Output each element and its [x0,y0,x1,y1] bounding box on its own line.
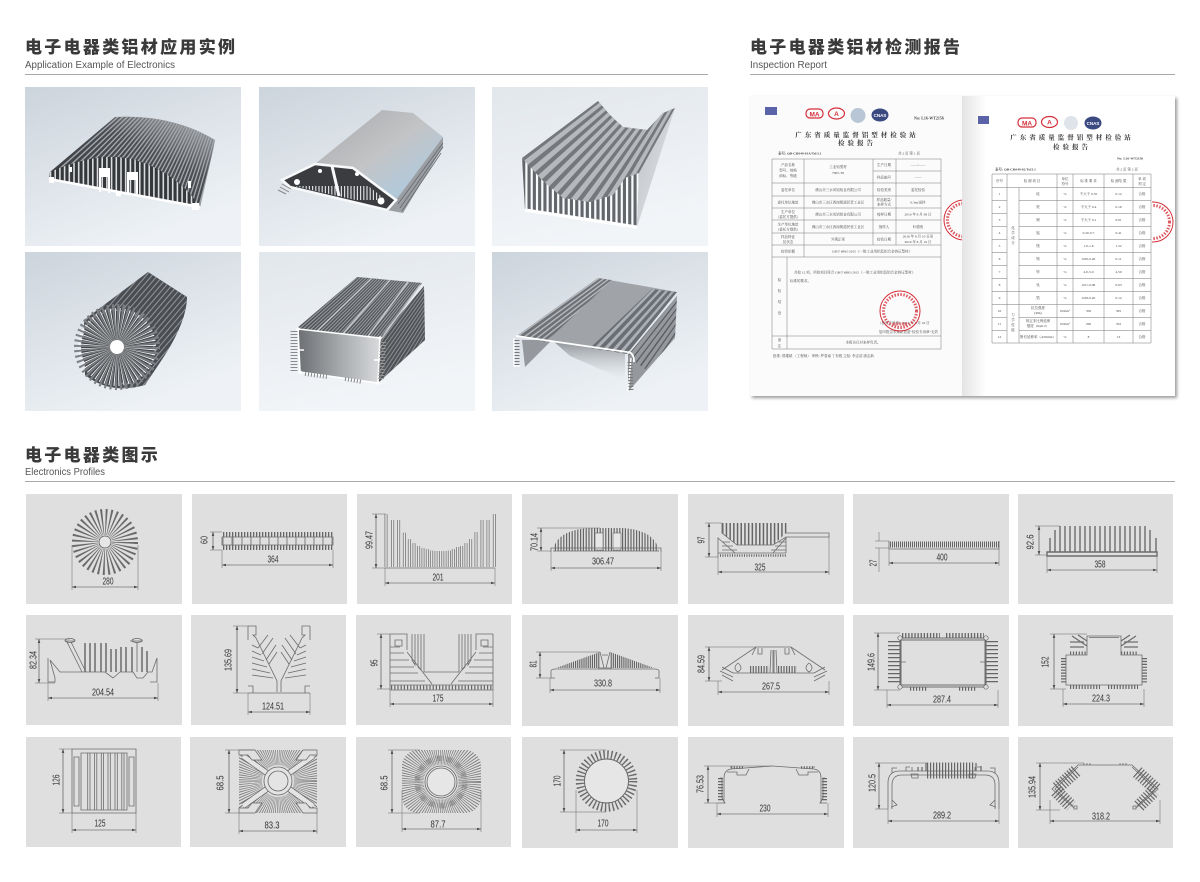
diagram panel: thin comb 400 x 27: 400 [936,552,948,564]
report table 2: 4.0-5.0 [1084,270,1094,274]
half stamp at page edge [944,200,962,240]
report table 2: 0.11 [1116,257,1122,261]
half stamp on right page [1152,202,1174,242]
title text: 电子电器类铝材检测报告 [750,37,962,57]
report heading: 广东省质量监督铝型材检验站 [1010,132,1134,142]
diagram panel: U-scoop fins 201 x 99.47: 99.47 [364,531,376,549]
report table 1: 检验类别 [877,187,891,192]
report table 2: 检 测结 果 [1111,178,1127,183]
report table 2: 铁 [1036,204,1040,209]
report table 1: 备 [778,337,782,342]
report table 2: 序号 [996,178,1004,183]
report table 2: 抗拉强度 [1031,305,1046,310]
diagram panel: slotted plate 125 x 126: 125 [94,818,106,830]
diagram panel: stepped fins 325 x 97: 325 [754,562,766,574]
signature line: 批准: 曾耀斌 （工程师） 审核: 罗春南 丁有根 主检: 李志浩 唐志新 [773,353,874,358]
report table 1: 佛山市三水凤铝铝业有限公司 [815,187,861,192]
diagram panel: fishbone V 124.51 x 135.69 [191,615,346,725]
report table 2: 9 [999,296,1001,300]
report table 2: 不大于 0.35 [1080,191,1098,196]
report table 1: 接样日期 [877,212,891,216]
diagram panel: lamp housing 204.54 x 82.34: 204.54 [92,688,114,698]
report table 2: 12 [998,335,1002,339]
report table 1: （检验专用章）2016 年 8 月 16 日 [878,320,930,325]
report table 2: 硅 [1036,191,1040,196]
diagram panel: comb bar 364 x 60: 364 [268,554,279,566]
photo: rectangular finned enclosure [259,252,475,411]
report table 2: 7 [999,270,1001,274]
report table 2: 学 [1011,230,1015,235]
report page 1 [750,96,984,396]
logos row: MA [809,112,820,118]
report table 2: 0.01-0.06 [1082,283,1095,287]
report table 2: 合格 [1138,191,1146,196]
report table 1: （委托方提供） [776,226,800,232]
report table 1: 及状态 [783,239,794,244]
report page 2 [962,96,1175,396]
diagram panel: finned box 287.4 x 149.6: 149.6 [866,653,878,671]
report table 2: 检 测 项 目 [1024,178,1040,183]
diagram panel: cross hub 83.3 x 68.5: 68.5 [216,775,226,790]
report table 1: 商标、等级 [779,173,797,178]
report table 1: 2016 年 8 月 10 日至 [903,234,934,238]
report table 2: 学 [1011,317,1015,322]
report table 2: % [1064,270,1067,274]
report table 1: 佛山市三水区西南街道民营工业区 [812,224,865,229]
english subtitle: Electronics Profiles [25,467,105,478]
report table 1: 验 [778,288,782,293]
diagram panel: channel 230 x 76.53: 230 [760,804,771,814]
report table 2: 单位 [1062,176,1069,181]
report table 1: —— [914,176,922,180]
report table 1: GB/T 6892-2015《一般工业用铝及铝合金挤压型材》 [832,248,912,254]
diagram panel: stepped fins 325 x 97 [688,494,844,604]
report table 2: 合格 [1138,230,1146,235]
logos row: CNAS [874,113,886,118]
diagram panel: straight fins 358 x 92.6 [1018,494,1173,604]
report table 1: 工业铝型材 [829,164,847,169]
report heading: 广东省质量监督铝型材检验站 [795,130,919,139]
diagram panel: domed fins 306.47 x 70.14: 70.14 [530,533,540,551]
divider rule [25,481,1175,482]
report table 2: % [1064,283,1067,287]
diagram panel: notched block 175 x 95 [356,615,511,725]
report table 1: 产品名称 [781,162,795,167]
diagram panel: trapezoid 267.5 x 84.59 [688,615,844,726]
report table 2: 锆 [1036,295,1040,300]
report table 2: 铜 [1036,217,1040,222]
report table 2: 0.12 [1115,296,1122,300]
report table 1: 型号、规格 [779,168,797,172]
report table 2: 不大于 0.1 [1081,217,1097,222]
diagram panel: stepped fins 325 x 97: 97 [696,536,708,544]
report table 2: 0.12 [1115,192,1122,196]
report table 2: 不大于 0.4 [1081,204,1097,209]
report table 2: (Rm) [1034,311,1043,315]
report table 2: 合格 [1138,256,1146,261]
report table 2: 钛 [1036,282,1040,287]
report table 2: 0.01 [1115,218,1122,222]
report table 2: 0.20-0.7 [1083,231,1095,235]
diagram panel: arched housing 289.2 x 120.5: 289.2 [933,810,951,822]
report table 1: 注 [778,343,782,348]
diagram panel: ring 170 x 170: 170 [598,818,609,830]
logos row: A [834,111,839,118]
diagram panel: trapezoid 267.5 x 84.59: 267.5 [762,682,780,692]
report table 2: 11 [998,322,1001,326]
report table 1: 抽样人 [879,224,890,229]
report table 1: 生产单位 [781,209,795,214]
report table 1: 检验依据 [781,248,795,254]
report table 1: 论 [778,310,782,315]
diagram panel: wing fins 318.2 x 135.94: 135.94 [1028,776,1038,798]
report table 1: 来样方式 [877,202,891,206]
divider rule [750,74,1175,75]
diagram panel: cross hub 83.3 x 68.5: 83.3 [264,820,280,832]
diagram panel: round fan 87.7 x 68.5: 68.5 [380,775,390,790]
diagram panel: slotted plate 125 x 126: 126 [52,774,62,786]
diagram panel: finned box 287.4 x 149.6: 287.4 [933,694,951,706]
report table 2: 锌 [1036,269,1040,274]
report table 1: （委托方提供） [776,214,800,219]
diagram panel: channel 230 x 76.53 [688,737,844,848]
report table 2: % [1064,296,1067,300]
report table 1: 委托单位 [781,187,795,192]
report table 2: 成 [1011,235,1015,240]
report table 1 [772,159,941,349]
photo: trapezoid housing with inner fins [259,87,475,246]
report table 2: 4 [999,231,1001,235]
page number: 共 2 页 第 2 页 [1116,166,1138,172]
report table 2: 1.0-1.8 [1084,244,1094,248]
report table 2: 10 [998,309,1002,313]
report table 2: 8 [999,283,1001,287]
report table 2: % [1064,231,1067,235]
diagram panel: fishbone V 124.51 x 135.69: 135.69 [224,649,234,671]
report table 1: 共检 12 项，所检项目符合 GB/T 6892-2015《一般工业用铝及铝合金挤压型材》 [794,270,915,274]
diagram panel: tabbed box 224.3 x 152: 152 [1040,656,1052,668]
report table 2: N/mm² [1060,322,1070,326]
report table 2: 0.16 [1115,205,1122,209]
page number: 共 2 页 第 1 页 [898,150,920,156]
report table 2: 合格 [1138,334,1146,339]
report table 2: 350 [1086,309,1091,313]
report table 2: 强度（Rp0.2） [1027,323,1049,328]
report table 1: 样品编号 [877,174,891,180]
diagram panel: U-scoop fins 201 x 99.47 [357,494,512,604]
diagram panel: round fan 87.7 x 68.5 [356,737,511,847]
report table 2: % [1064,218,1067,222]
report table 1: 本报告仅对来样负责。 [846,340,880,344]
report table 2: 352 [1116,322,1121,326]
diagram panel: sunburst 280 [26,494,182,604]
diagram panel: wing fins 318.2 x 135.94 [1018,737,1173,848]
diagram panel: channel 230 x 76.53: 76.53 [696,775,706,793]
report table 1: 叶德贵 [913,224,924,229]
report table 1: 样品特征 [781,234,795,239]
diagram panel: lamp housing 204.54 x 82.34: 82.34 [28,651,40,669]
report table 2: 合格 [1138,217,1146,222]
report table 2: 4.50 [1115,270,1122,274]
diagram panel: ring 170 x 170 [522,737,678,848]
logos row: MA [1022,120,1032,128]
diagram panel: cross hub 83.3 x 68.5 [190,737,346,847]
red inspection stamp [880,291,920,331]
heading: electronics profiles [25,445,1175,482]
diagram panel: straight fins 358 x 92.6: 358 [1094,560,1106,570]
diagram panel: tabbed box 224.3 x 152 [1018,615,1173,726]
report table 2: 2 [999,205,1001,209]
report table 2: 合格 [1138,282,1146,287]
report table 1: 标准的要求。 [790,278,811,283]
report table 2: 合格 [1138,295,1146,300]
report table 2: 5 [999,244,1001,248]
report table 2: 1 [999,192,1001,196]
diagram panel: U-scoop fins 201 x 99.47: 201 [432,572,444,584]
report table 2: 断后延伸率（A50mm） [1020,334,1056,339]
report table 2: 单 项 [1138,176,1146,181]
heading: application examples [25,37,708,75]
report table 2: 1.52 [1115,244,1122,248]
report table 1: ——/—— [910,163,926,167]
title text: 电子电器类铝材应用实例 [25,37,237,57]
report table 2: 性 [1011,322,1015,327]
report table 1: 外观正常 [831,236,845,242]
report table 2: 力 [1011,312,1015,317]
diagram panel: notched block 175 x 95: 95 [370,659,380,666]
diagram panel: thin comb 400 x 27 [853,494,1009,604]
report table 2: % [1064,192,1067,196]
report table 2: 化 [1011,225,1015,230]
diagram panel: straight fins 358 x 92.6: 92.6 [1026,534,1036,550]
report table 2: 标 准 要 求 [1080,178,1097,183]
diagram panel: trapezoid 267.5 x 84.59: 84.59 [696,655,708,673]
diagram panel: low dome 330.8 x 81: 81 [528,660,540,668]
report table 1: 检验日期 [877,236,891,242]
report table 2: 6 [999,257,1001,261]
title text: 电子电器类图示 [25,445,160,465]
report table 1: 生产日期 [877,162,891,167]
diagram panel: low dome 330.8 x 81 [522,615,678,726]
diagram panel: comb bar 364 x 60 [192,494,347,604]
photo: open channel housing [492,252,708,411]
diagram panel: slotted plate 125 x 126 [26,737,181,847]
report table 1: 结 [778,299,782,304]
divider rule [25,74,708,75]
report table 2: 锰 [1036,230,1040,235]
report table 1: 佛山市三水区西南街道民营工业区 [812,200,865,204]
report table 2: % [1064,205,1067,209]
diagram panel: notched block 175 x 95: 175 [432,694,444,704]
report number: No: L16-WT2156 [1117,156,1143,160]
report table 2: 合格 [1138,204,1146,209]
report table 2: 合格 [1138,269,1146,274]
diagram panel: round fan 87.7 x 68.5: 87.7 [430,820,446,830]
report table 2: 合格 [1138,243,1146,248]
english subtitle: Application Example of Electronics [25,60,175,71]
diagram panel: tabbed box 224.3 x 152: 224.3 [1092,694,1110,704]
report table 2: 分 [1011,240,1015,245]
report subheading: 检验报告 [838,138,876,147]
report table 2: 395 [1116,309,1121,313]
inspection report: two-page document [750,96,1177,398]
diagram panel: arched housing 289.2 x 120.5: 120.5 [868,774,878,792]
report table 1: 2016 年 8 月 08 日 [904,212,932,216]
diagram panel: comb bar 364 x 60: 60 [200,536,210,544]
report table 2: 合格 [1138,321,1146,326]
logos row [978,116,1102,130]
report table 2: % [1064,335,1067,339]
diagram panel: fishbone V 124.51 x 135.69: 124.51 [262,702,284,712]
diagram panel: lamp housing 204.54 x 82.34 [26,615,182,725]
diagram panel: domed fins 306.47 x 70.14: 306.47 [592,556,614,568]
diagram panel: domed fins 306.47 x 70.14 [522,494,678,604]
report table 2: 3 [999,218,1001,222]
photo: U-shaped fin extrusion [492,87,708,246]
report table 2: 0.08-0.20 [1082,296,1095,300]
report table 1: 委托单位地址 [778,200,799,204]
diagram panel: low dome 330.8 x 81: 330.8 [594,678,612,690]
report table 2: 合格 [1138,308,1146,313]
report table 2: 铬 [1036,256,1040,261]
diagram panel: wing fins 318.2 x 135.94: 318.2 [1092,812,1110,822]
report table 2: 符号 [1062,181,1069,186]
report table 2: 0.03 [1115,283,1122,287]
report table 2: 0.06-0.20 [1082,257,1095,261]
report table 2: 0.41 [1115,231,1122,235]
report table 2: 判 定 [1138,181,1146,186]
form number line: 表号: QB-CR049-02/Tsl/3.1 [995,166,1036,172]
report table 1: 委托检验 [911,187,925,192]
report table 1: 样品数量/ [877,197,892,202]
report table 2: 能 [1011,327,1015,332]
logos row: CNAS [1087,121,1099,126]
english subtitle: Inspection Report [750,60,827,71]
report table 1: 生产单位地址 [778,222,799,226]
report table 2: N/mm² [1060,309,1070,313]
diagram panel: ring 170 x 170: 170 [552,775,564,786]
report table 1: 复印报告未重新加盖“检验专用章”无效 [879,329,938,334]
photo: radial sunflower heat sink [25,250,241,411]
logos row [765,107,944,123]
report table 2: 规定非比例延伸 [1026,318,1051,323]
report table 2 [992,174,1151,343]
red inspection stamp: 检验专用章 [892,321,908,326]
report table 1: 0.3m/送样 [910,200,926,204]
form number line: 表号: QB-CR049-01A/Tsl/3.1 [778,150,822,156]
diagram panel: sunburst 280: 280 [102,576,114,588]
report table 2: 8 [1088,335,1090,339]
diagram panel: arched housing 289.2 x 120.5 [853,737,1009,848]
report table 2: % [1064,244,1067,248]
logos row: No: L16-WT2156 [914,116,944,120]
diagram panel: finned box 287.4 x 149.6 [853,615,1009,726]
photo: wide heat sink with arched fins [25,87,241,246]
report table 2: 290 [1086,322,1091,326]
report table 1: 检 [778,277,782,282]
heading: inspection report [750,37,1175,75]
report subheading: 检验报告 [1053,142,1091,151]
report table 1: 2016 年 8 月 16 日 [904,239,932,244]
report table 2: 13 [1117,335,1120,339]
report table 1: 佛山市三水凤铝铝业有限公司 [815,212,861,216]
diagram panel: thin comb 400 x 27: 27 [868,559,880,566]
page shadow [752,98,1177,398]
report table 2: % [1064,257,1067,261]
report table 2: 镁 [1036,243,1040,248]
report table 1: 7005-T6 [832,171,844,175]
logos row: A [1047,120,1052,126]
